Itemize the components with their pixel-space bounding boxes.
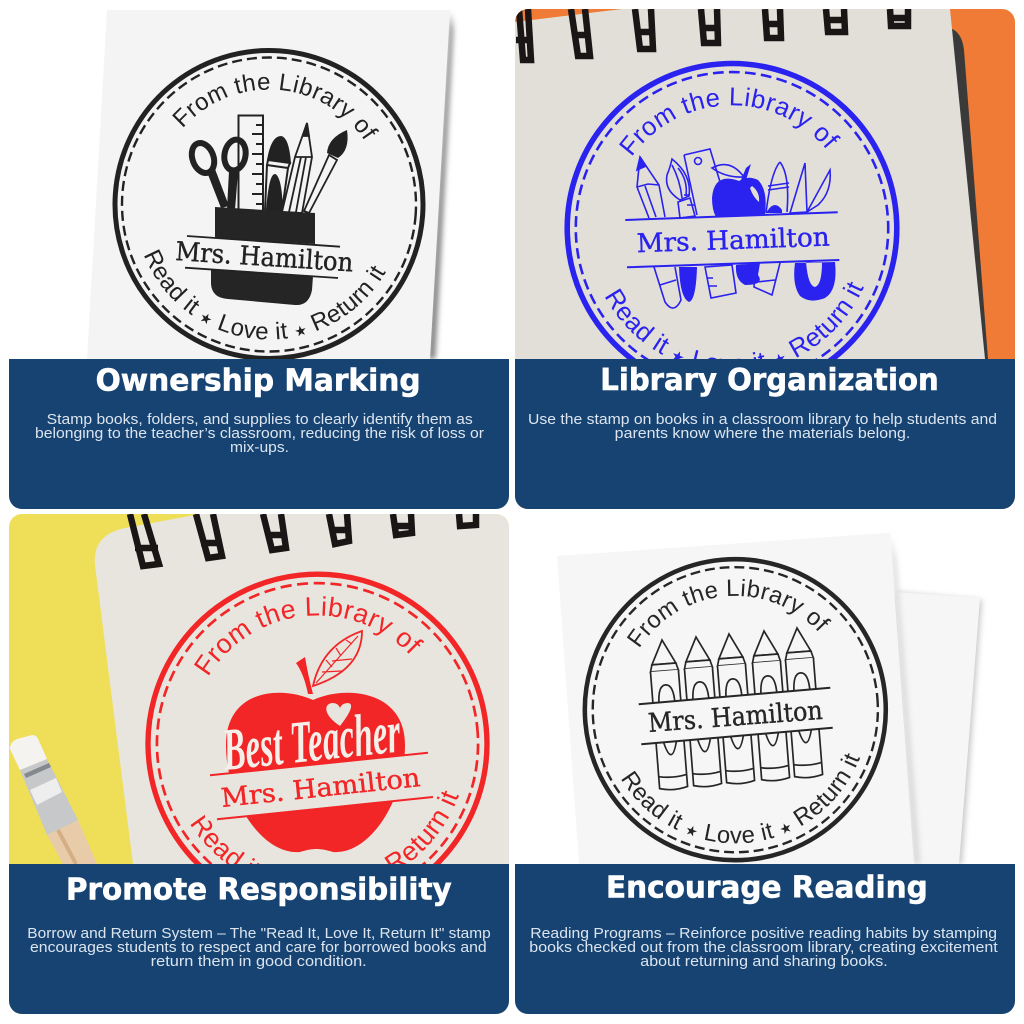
body text: belonging to the teacher’s classroom, reducing the risk of loss or [35, 426, 484, 442]
body text [27, 926, 491, 970]
body text: Stamp books, folders, and supplies to clearly identify them as [47, 412, 473, 428]
stamp: black pencil cup [112, 48, 426, 359]
icon: pencil [10, 735, 97, 864]
heading: Ownership Marking [96, 364, 421, 399]
front paper sheet [557, 533, 914, 864]
body text: Borrow and Return System – The "Read It, Love It, Return It" stamp [27, 926, 491, 942]
navy caption panel [9, 864, 509, 1014]
body text: mix-ups. [230, 440, 289, 456]
navy caption panel [515, 359, 1015, 509]
stamp: blue school supplies: Read it ★ Love it ★ Return it [605, 282, 864, 359]
body text: Use the stamp on books in a classroom library to help students and [528, 412, 997, 428]
body text: Reading Programs – Reinforce positive reading habits by stamping [530, 926, 997, 942]
stamp: black crayons: From the Library of [626, 578, 832, 647]
name band cut-out [205, 752, 440, 821]
navy caption panel [515, 864, 1015, 1014]
body text: parents know where the materials belong. [615, 426, 910, 442]
icon: blue apple [679, 164, 836, 302]
notebook shadow [952, 28, 988, 359]
icon: heart [326, 703, 351, 726]
panel: ownership marking [9, 10, 509, 509]
name banner: Mrs. Hamilton [636, 223, 830, 259]
stamp: black crayons [582, 556, 888, 862]
icon: apple stem and leaf [296, 631, 362, 694]
paper sheet [87, 10, 450, 359]
icon: paint brush [304, 130, 348, 213]
stamp: black pencil cup: From the Library of [172, 74, 379, 140]
panel: library organization [515, 9, 1015, 509]
name banner [625, 212, 839, 267]
heading: Promote Responsibility [66, 873, 452, 908]
spiral binding [516, 9, 908, 60]
school supply outlines [637, 149, 830, 308]
body text: books checked out from the classroom library, creating excitement [529, 940, 998, 956]
stamp: black pencil cup: Read it ★ Love it ★ Return it [144, 249, 386, 340]
crayon row [648, 627, 823, 791]
script text: Best Teacher: Best Teacher [219, 699, 404, 783]
panel: encourage reading [515, 533, 1015, 1014]
body text: encourages students to respect and care for borrowed books and [30, 940, 487, 956]
body text [529, 926, 998, 970]
notebook page [515, 9, 985, 359]
navy caption panel [9, 359, 509, 509]
body text [35, 412, 484, 456]
stamp: red apple: Read it ★ Love it ★ Return it [190, 790, 459, 864]
stamp: blue school supplies [564, 60, 900, 359]
name banner: Mrs. Hamilton [220, 763, 422, 814]
icon: pencil [282, 123, 312, 213]
icon: apple body [226, 693, 405, 852]
icon: crayon [265, 137, 290, 211]
stamp: red apple: From the Library of [194, 596, 424, 676]
name banner: Mrs. Hamilton [175, 237, 354, 278]
back paper sheet [895, 592, 980, 864]
panel: promote responsibility [9, 514, 509, 1014]
name banner: Mrs. Hamilton [647, 696, 824, 739]
body text [528, 412, 997, 442]
heading: Encourage Reading [606, 871, 928, 906]
heading: Library Organization [600, 363, 939, 398]
name banner [210, 753, 433, 819]
body text: about returning and sharing books. [640, 954, 888, 970]
icon: scissors [188, 138, 248, 210]
stamp: black crayons: Read it ★ Love it ★ Return it [621, 753, 860, 844]
stamp: red apple [145, 572, 490, 864]
body text: return them in good condition. [151, 954, 367, 970]
icon: black cup [211, 207, 315, 305]
icon: ruler [238, 116, 263, 212]
notebook page [95, 514, 509, 864]
stamp: blue school supplies: From the Library of [619, 88, 841, 156]
spiral binding [130, 514, 476, 566]
